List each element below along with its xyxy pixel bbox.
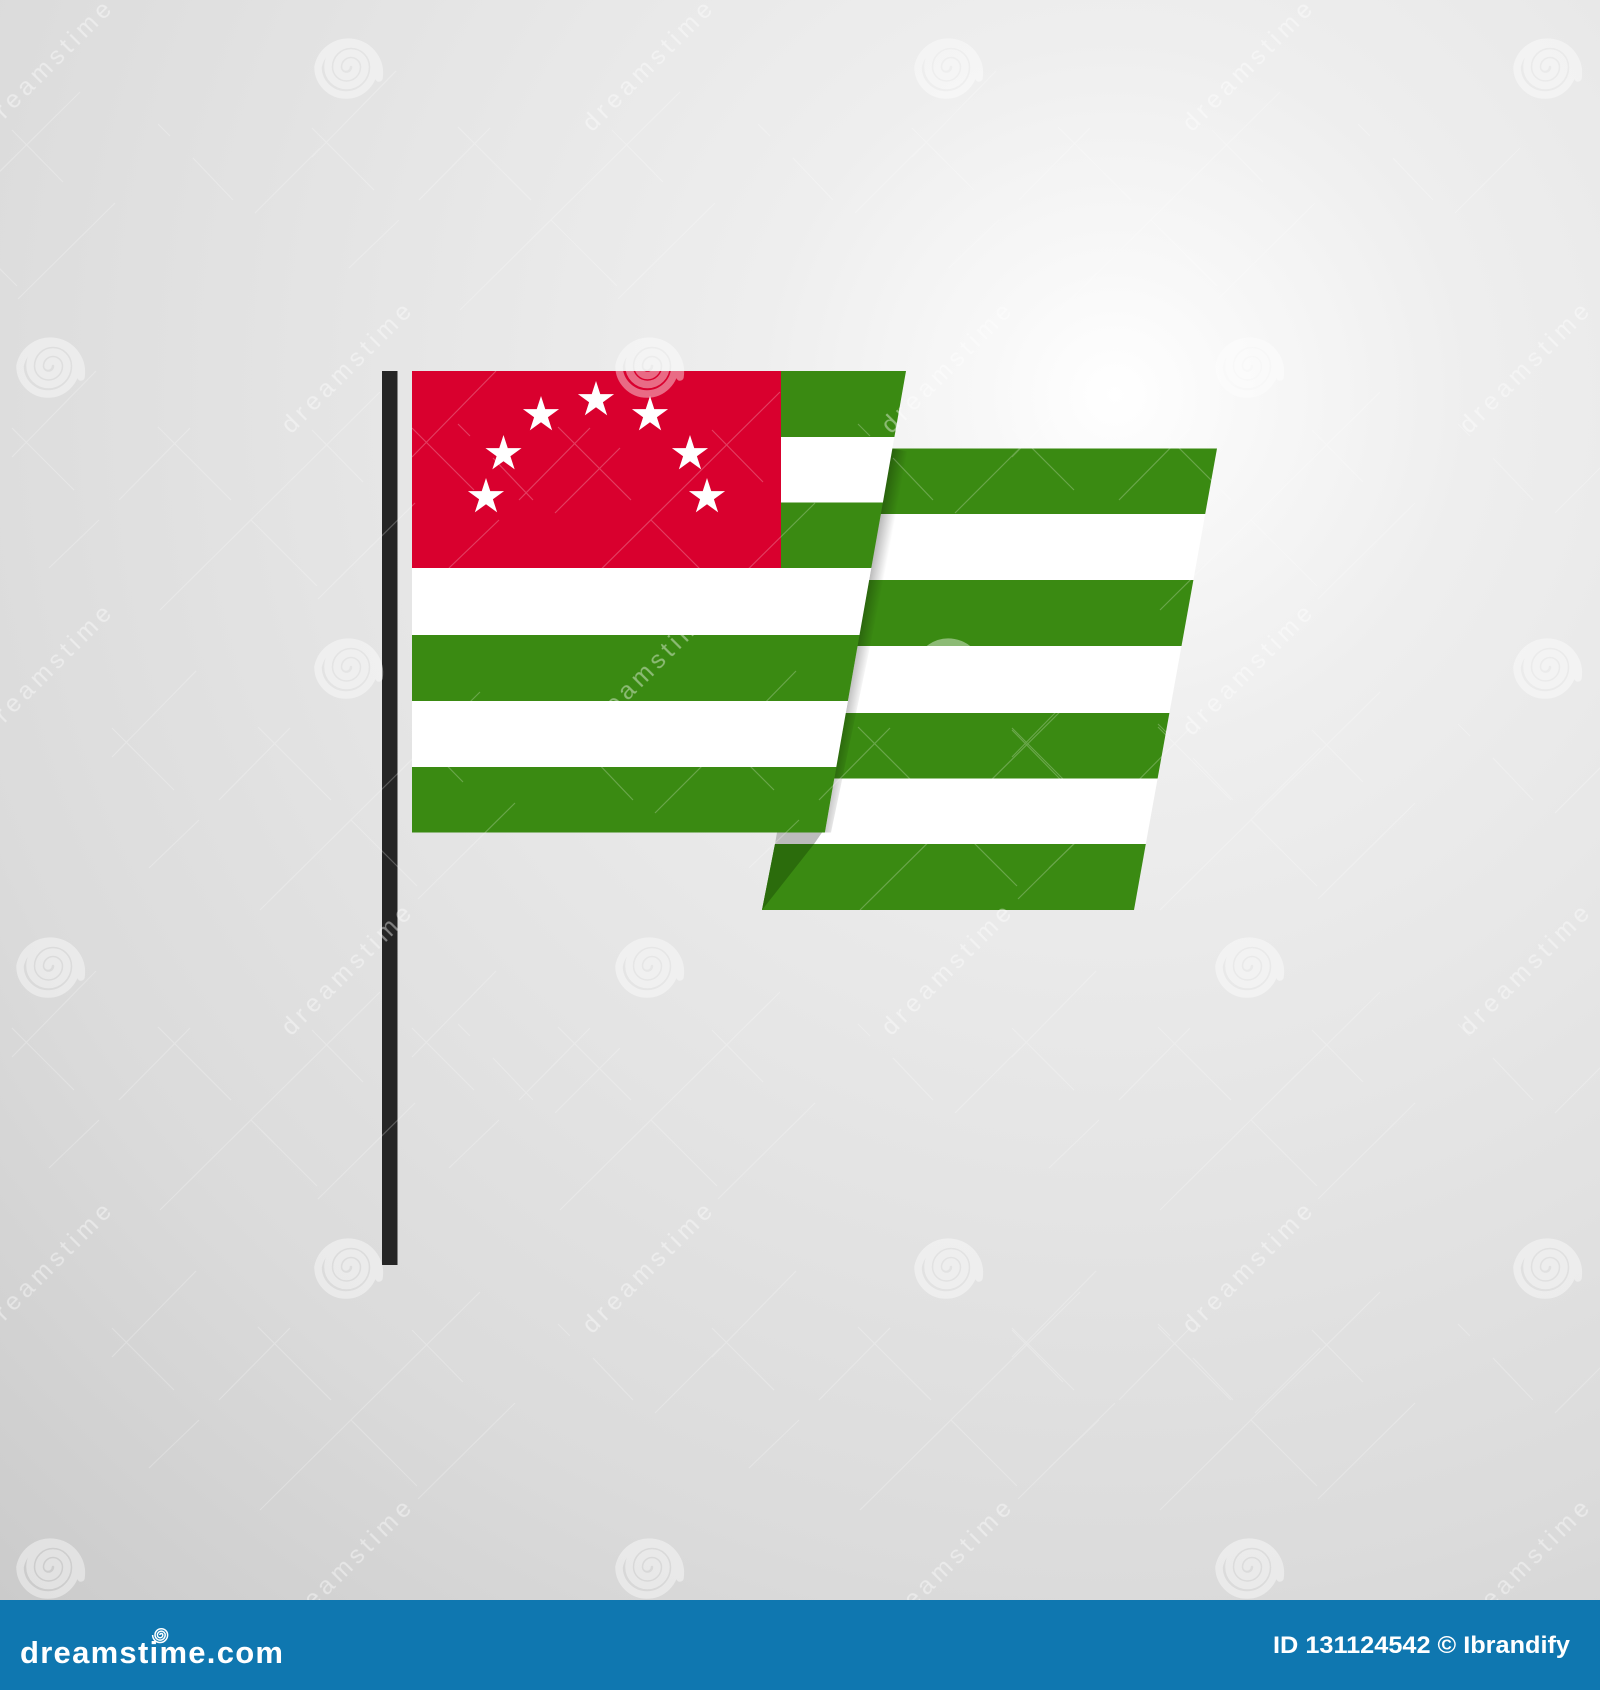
image ID and credit: ID 131124542 © Ibrandify	[1273, 1632, 1571, 1659]
watermark text: dreamstime	[876, 298, 1017, 439]
watermark text: dreamstime	[876, 1495, 1017, 1636]
watermark text: dreamstime	[1454, 1495, 1595, 1636]
fold underside: dark green triangle	[762, 844, 814, 910]
flag rear panel	[762, 448, 1217, 910]
watermark text: dreamstime	[876, 900, 1017, 1041]
footer logo text: dreamstime.com	[20, 1635, 283, 1670]
fold shadow	[825, 448, 911, 832]
watermark text: dreamstime	[577, 1198, 718, 1339]
watermark text: dreamstime	[577, 600, 718, 741]
fold underside: grey shadow	[775, 832, 822, 844]
red canton	[412, 371, 781, 568]
flag front panel	[412, 371, 906, 832]
flagpole	[382, 371, 398, 1265]
seven white stars	[468, 381, 725, 512]
watermark text: dreamstime	[276, 900, 417, 1041]
watermark text: dreamstime	[1177, 600, 1318, 741]
watermark text: dreamstime	[1454, 900, 1595, 1041]
watermark text: dreamstime	[1454, 298, 1595, 439]
watermark text: dreamstime	[1177, 1198, 1318, 1339]
watermark text: dreamstime	[276, 1495, 417, 1636]
waving flag	[412, 371, 1217, 910]
watermark text: dreamstime	[276, 298, 417, 439]
footer banner	[0, 1600, 1600, 1690]
footer logo spiral	[153, 1629, 168, 1642]
